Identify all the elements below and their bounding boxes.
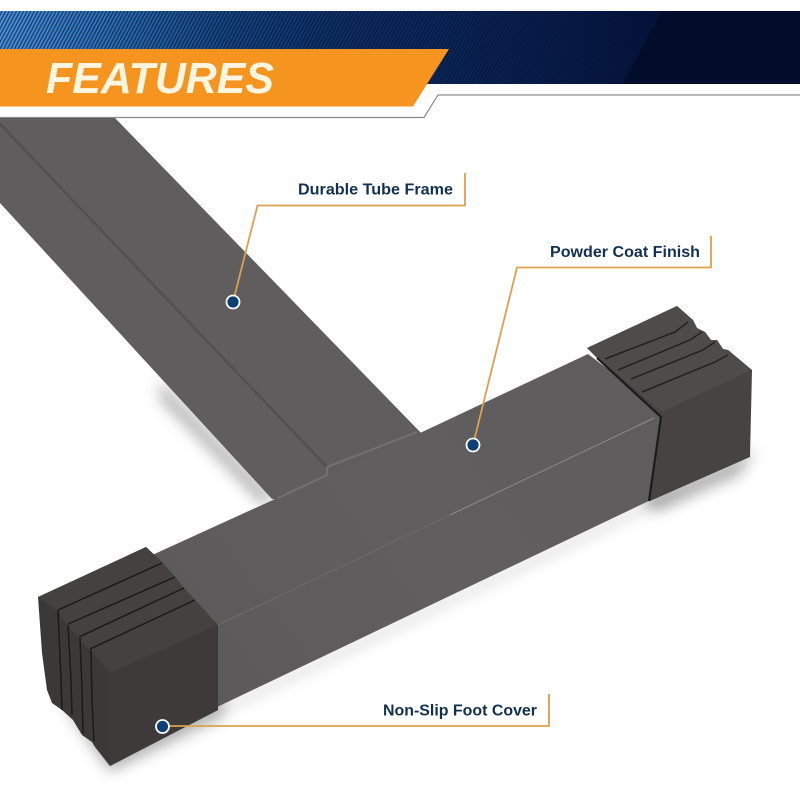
callout: Non-Slip Foot Cover: [156, 694, 549, 733]
left cap ribs: [58, 563, 195, 741]
marker dot: [226, 296, 240, 308]
header band: [0, 11, 800, 84]
label: Non-Slip Foot Cover: [383, 702, 537, 720]
callout: Durable Tube Frame: [226, 173, 465, 308]
tube crease: [0, 124, 327, 467]
ground shadows: [60, 380, 755, 772]
right cap top face: [587, 306, 752, 412]
left cap front face: [110, 625, 218, 766]
weld seam: [278, 432, 417, 498]
frame: cross tube: [150, 354, 664, 708]
tube edge highlight: [218, 515, 450, 625]
header outline stroke: [0, 95, 800, 118]
title: FEATURES: [46, 54, 274, 103]
callout: Powder Coat Finish: [466, 236, 711, 452]
left foot cap: [38, 547, 218, 766]
frame: long tube: [0, 118, 424, 500]
left cap top face: [38, 547, 218, 673]
right foot cap: [587, 306, 752, 501]
right cap seam: [597, 358, 661, 501]
label: Powder Coat Finish: [550, 244, 700, 261]
marker dot: [466, 438, 480, 452]
label: Durable Tube Frame: [298, 182, 453, 198]
orange title banner: [0, 49, 449, 106]
marker dot: [156, 720, 169, 733]
right cap ribs: [605, 322, 728, 392]
